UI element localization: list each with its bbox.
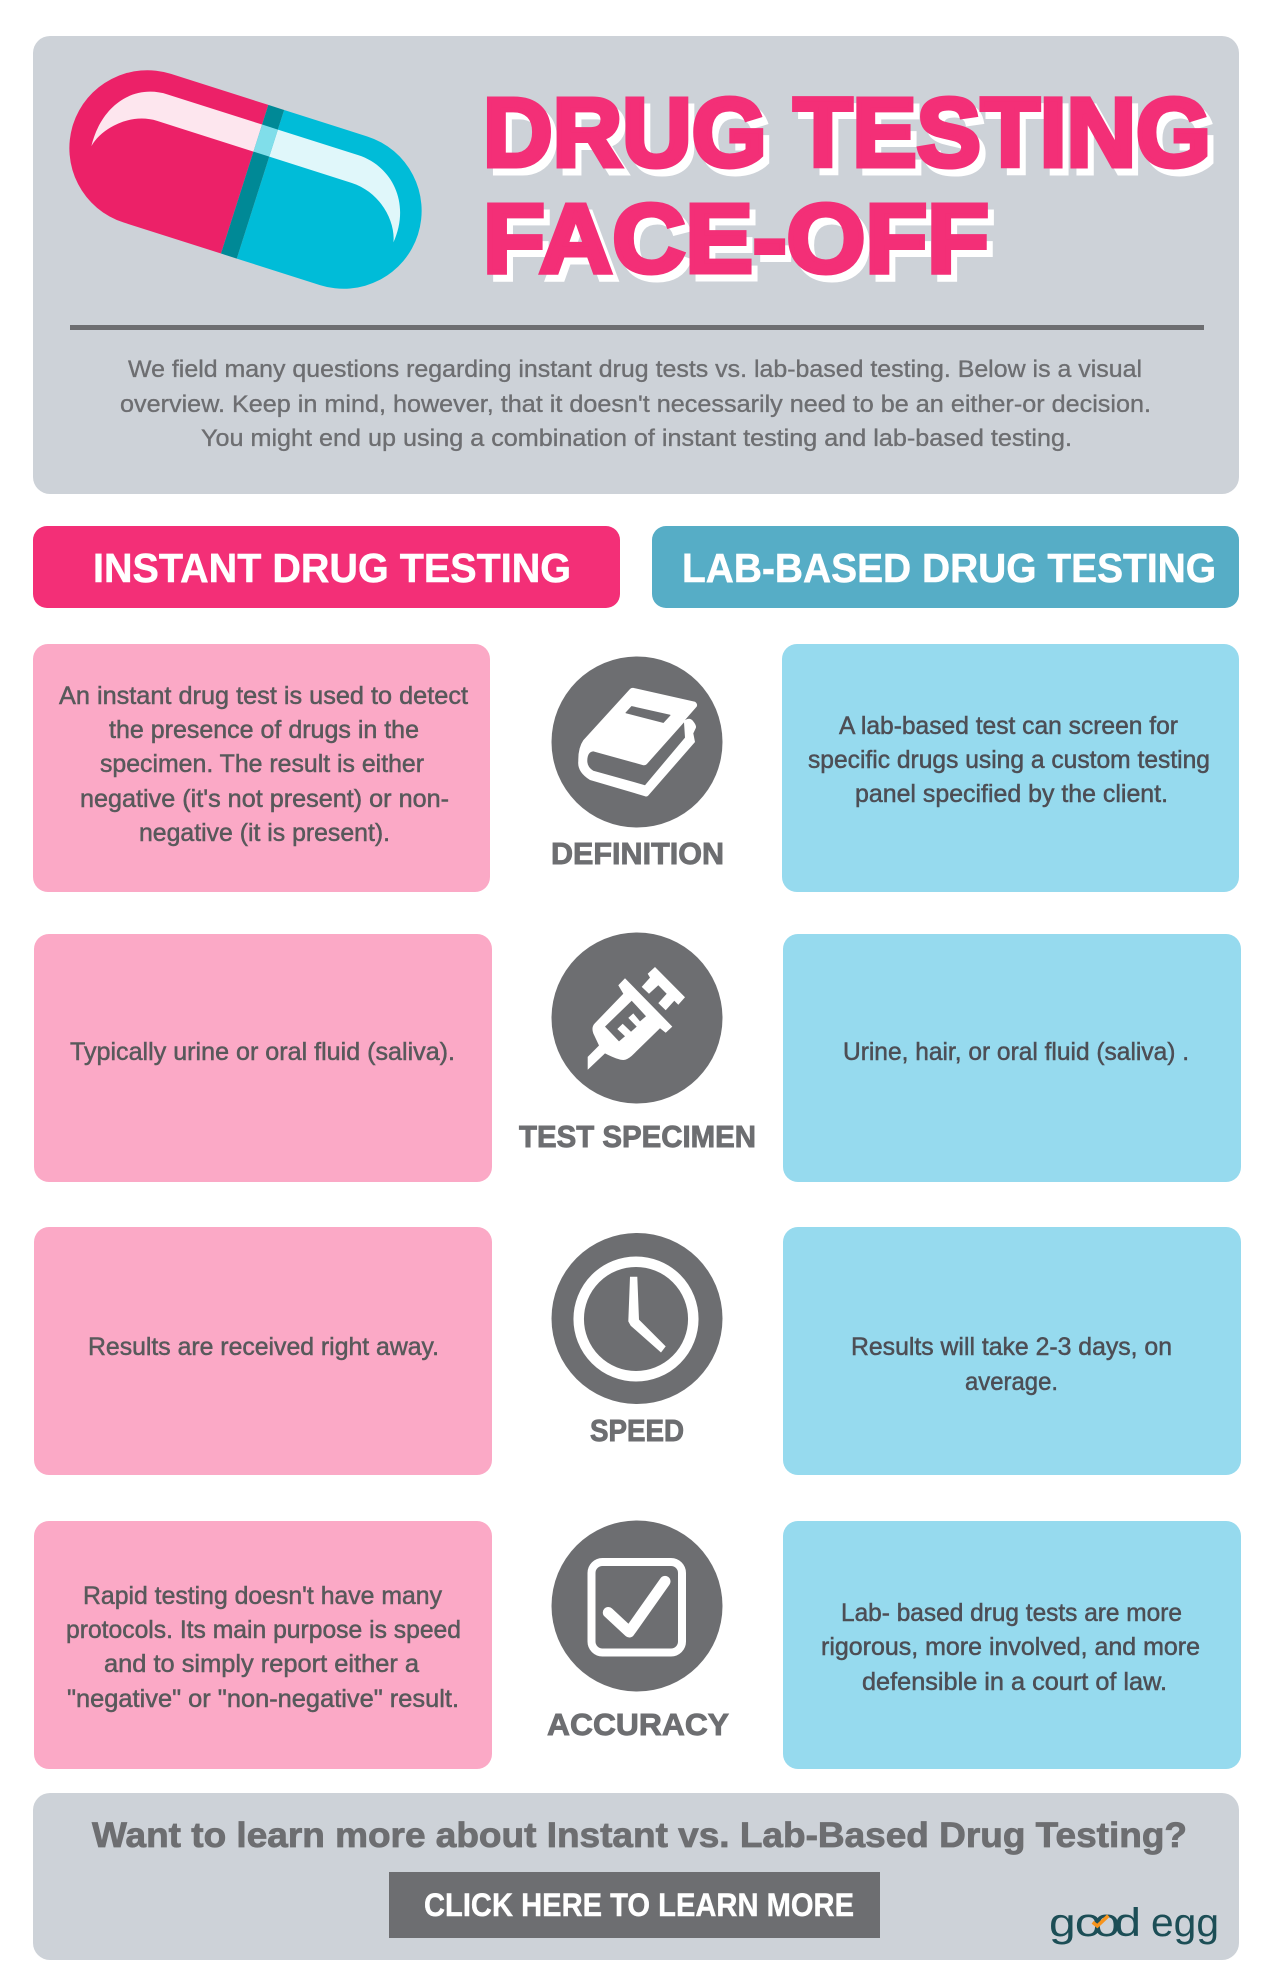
intro text: You might end up using a combination of instant testing and lab-based testing. bbox=[201, 425, 1072, 452]
card: instant accuracy bbox=[34, 1521, 492, 1769]
footer heading: Want to learn more about Instant vs. Lab-Based Drug Testing? bbox=[92, 1816, 1187, 1855]
icon: checkbox bbox=[552, 1520, 722, 1692]
logo: good egg bbox=[1049, 1901, 1219, 1945]
card: instant accuracy: Rapid testing doesn't have many bbox=[83, 1582, 442, 1610]
card: instant definition: specimen. The result is either bbox=[100, 750, 424, 778]
card: instant speed: Results are received right away. bbox=[88, 1333, 439, 1361]
icon: pill capsule bbox=[49, 50, 442, 309]
card: lab definition: A lab-based test can screen for bbox=[839, 712, 1178, 740]
card: lab definition bbox=[782, 644, 1239, 892]
icon: syringe bbox=[552, 932, 722, 1104]
card: lab speed: Results will take 2-3 days, on bbox=[851, 1333, 1172, 1361]
card: instant definition: the presence of drugs in the bbox=[109, 716, 419, 744]
intro text: We field many questions regarding instant drug tests vs. lab-based testing. Below is a visual bbox=[128, 356, 1142, 383]
icon: book bbox=[552, 656, 722, 828]
card: instant definition: An instant drug test is used to detect bbox=[59, 682, 468, 710]
icon: clock bbox=[552, 1233, 722, 1404]
column heading: lab-based drug testing: LAB-BASED DRUG TESTING bbox=[682, 545, 1216, 591]
panel: footer call to action bbox=[33, 1793, 1239, 1960]
card: lab accuracy bbox=[783, 1521, 1241, 1769]
card: lab speed bbox=[783, 1227, 1241, 1475]
title: DRUG TESTING bbox=[483, 78, 1211, 187]
intro text bbox=[120, 356, 1151, 452]
title: DRUG TESTING bbox=[489, 85, 1217, 194]
panel: header bbox=[33, 36, 1239, 494]
title: FACE-OFF bbox=[483, 184, 989, 293]
label: definition: DEFINITION bbox=[551, 836, 724, 871]
card: instant definition: negative (it is present). bbox=[139, 819, 390, 847]
card: lab accuracy: defensible in a court of law. bbox=[862, 1668, 1167, 1696]
logo: good egg: good bbox=[1049, 1901, 1141, 1945]
button bbox=[389, 1872, 880, 1938]
card: lab accuracy: rigorous, more involved, and more bbox=[821, 1633, 1200, 1661]
card: instant accuracy: and to simply report either a bbox=[104, 1650, 419, 1678]
card: instant specimen: Typically urine or oral fluid (saliva). bbox=[70, 1038, 455, 1066]
card: lab definition: specific drugs using a custom testing bbox=[808, 746, 1210, 774]
card: lab specimen: Urine, hair, or oral fluid (saliva) . bbox=[843, 1038, 1189, 1066]
intro text: overview. Keep in mind, however, that it doesn't necessarily need to be an either-or decision. bbox=[120, 391, 1151, 418]
title bbox=[483, 78, 1217, 300]
column heading: lab-based drug testing bbox=[652, 526, 1239, 608]
card: lab definition: panel specified by the client. bbox=[855, 780, 1168, 808]
card: instant accuracy: "negative" or "non-negative" result. bbox=[67, 1685, 459, 1713]
label: speed: SPEED bbox=[590, 1413, 684, 1448]
card: lab accuracy: Lab- based drug tests are more bbox=[841, 1599, 1182, 1627]
card: instant specimen bbox=[34, 934, 492, 1182]
label: accuracy: ACCURACY bbox=[547, 1707, 729, 1742]
label: test specimen: TEST SPECIMEN bbox=[519, 1119, 756, 1154]
card: instant definition bbox=[33, 644, 490, 892]
card: lab speed: average. bbox=[965, 1368, 1058, 1396]
column heading: instant drug testing: INSTANT DRUG TESTING bbox=[93, 545, 571, 591]
card: lab specimen bbox=[783, 934, 1241, 1182]
logo: good egg: egg bbox=[1151, 1901, 1219, 1945]
button: CLICK HERE TO LEARN MORE bbox=[424, 1887, 854, 1923]
card: instant definition: negative (it's not present) or non- bbox=[80, 785, 449, 813]
card: instant speed bbox=[34, 1227, 492, 1475]
card: instant accuracy: protocols. Its main purpose is speed bbox=[66, 1616, 461, 1644]
column heading: instant drug testing bbox=[33, 526, 620, 608]
title: FACE-OFF bbox=[489, 191, 995, 300]
